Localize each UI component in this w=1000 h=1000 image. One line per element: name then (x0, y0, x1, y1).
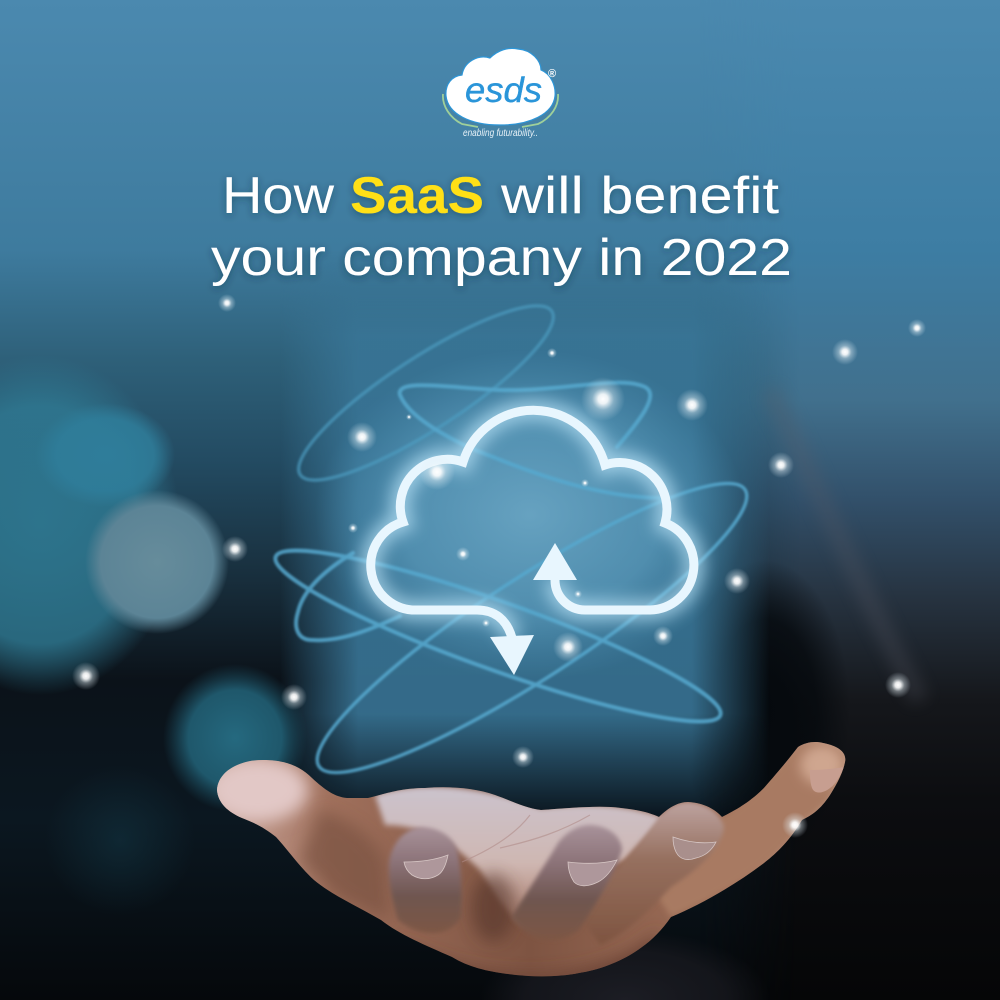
palm creases (462, 815, 590, 862)
right side sleeve (742, 266, 1000, 946)
little finger (640, 743, 846, 917)
middle finger (511, 825, 622, 940)
hand base (217, 742, 846, 976)
glow behind cloud (315, 350, 745, 680)
dark lower sleeve (480, 860, 770, 1000)
title (211, 167, 792, 287)
icon: cloud with arrows (371, 410, 694, 675)
palm (375, 786, 665, 926)
logo: esds (443, 48, 558, 139)
dark edge of sleeve (680, 560, 850, 860)
title: will benefit (500, 167, 780, 225)
hands around logo (443, 94, 558, 127)
title: How (222, 167, 334, 225)
logo tagline: enabling futurability.. (463, 128, 538, 139)
sparkle on finger (782, 812, 808, 838)
arrow up (533, 543, 577, 580)
sparkles (72, 294, 926, 768)
registered mark: ® (548, 68, 556, 80)
cloud glow (371, 410, 694, 638)
logo wordmark: esds (465, 71, 542, 110)
title: your company in 2022 (211, 229, 792, 287)
bokeh lights left (0, 355, 307, 915)
cloud outline (371, 410, 694, 638)
index finger (596, 802, 725, 942)
orbit lines (264, 281, 772, 808)
lower palm shade (456, 933, 657, 976)
little finger tip (800, 745, 844, 785)
hand (217, 742, 846, 976)
centre blue column (286, 312, 764, 806)
thumb shade (300, 810, 390, 920)
title: SaaS (350, 167, 484, 225)
streak on sleeve (770, 390, 920, 700)
ring finger (389, 827, 462, 933)
thumb tip (208, 758, 308, 822)
gap between fingers (471, 874, 515, 942)
finger nails (404, 767, 844, 886)
arrow down (490, 635, 534, 675)
logo cloud (446, 48, 555, 125)
